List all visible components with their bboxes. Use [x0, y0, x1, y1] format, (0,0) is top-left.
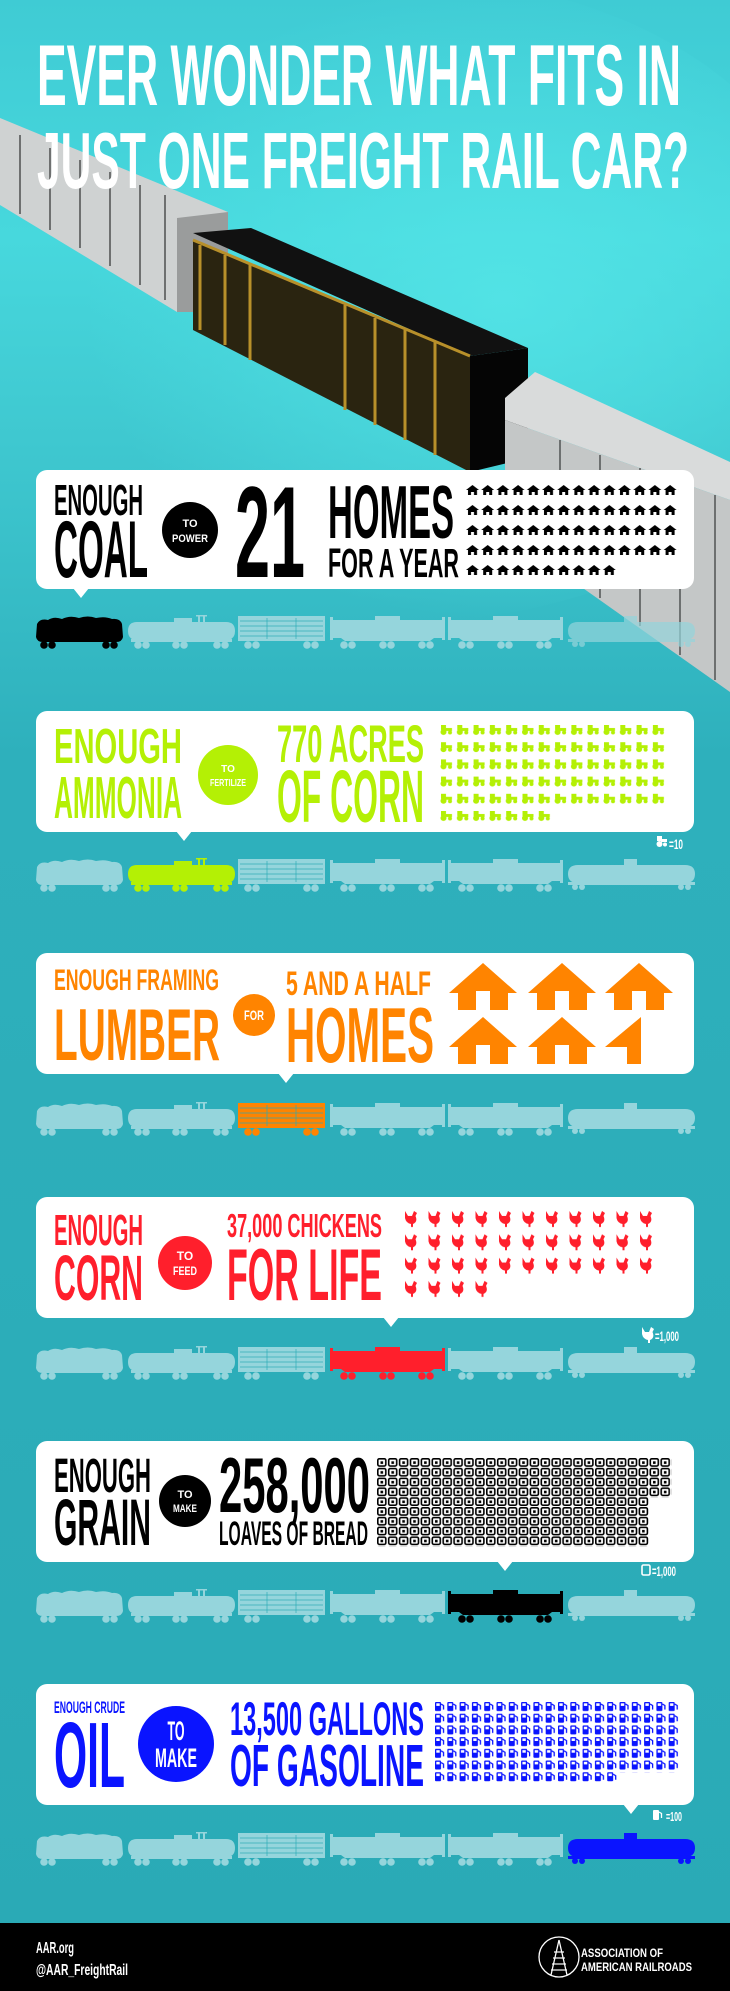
stat: 21 homes [235, 459, 459, 605]
stat: 13,500 gallons of gasoline [230, 1692, 424, 1799]
panel: corn: CORN [54, 1242, 143, 1314]
panel: grain: ENOUGH [54, 1450, 151, 1503]
legend: tractor = 10: =10 [669, 836, 683, 852]
legend: tractor = 10 [656, 836, 683, 852]
stat: 21 homes: FOR A YEAR [328, 540, 459, 586]
title [37, 28, 689, 205]
stat: 37,000 chickens for life [227, 1207, 382, 1316]
panel: corn: ENOUGH [54, 1206, 143, 1255]
stat: 21 homes: 21 [235, 459, 305, 605]
train: oil highlighted [36, 1832, 695, 1866]
circle: to make [159, 1475, 211, 1527]
train: corn highlighted [36, 1346, 695, 1380]
logo: association of american railroads: ASSOCIATION OF [581, 1946, 663, 1960]
train: ammonia highlighted [36, 858, 695, 892]
legend: chicken = 1,000: =1,000 [655, 1328, 679, 1344]
stat: 13,500 gallons of gasoline: 13,500 GALLONS [230, 1692, 424, 1745]
train: lumber highlighted [36, 1102, 695, 1136]
panel: crude oil: OIL [54, 1703, 125, 1807]
footer [0, 1923, 730, 1991]
heading: enough corn [54, 1206, 143, 1314]
train: grain highlighted [36, 1589, 695, 1623]
heading: enough grain [54, 1450, 151, 1559]
circle: to fertilize: TO [221, 764, 235, 775]
panel: coal: COAL [54, 505, 148, 595]
photo: freight boxcars [0, 118, 730, 692]
stat: 37,000 chickens for life: 37,000 CHICKENS [227, 1207, 382, 1244]
footer: links: @AAR_FreightRail [36, 1962, 128, 1979]
icon grid: tractors [440, 725, 668, 822]
circle: to make: TO [168, 1716, 184, 1746]
circle: to fertilize: FERTILIZE [210, 778, 246, 789]
circle: to power: TO [182, 518, 198, 530]
icon grid: bread [377, 1458, 671, 1546]
legend: bread = 1,000: =1,000 [652, 1563, 676, 1579]
heading: enough crude oil: ENOUGH CRUDE [54, 1698, 125, 1717]
circle: to feed: TO [177, 1249, 193, 1263]
circle: to fertilize [198, 745, 258, 805]
icon grid: chickens [403, 1210, 662, 1300]
heading: enough framing lumber [54, 964, 220, 1076]
heading: enough framing lumber: LUMBER [54, 995, 220, 1076]
stat: 5 and a half homes [286, 965, 434, 1079]
heading: enough framing lumber: ENOUGH FRAMING [54, 964, 219, 997]
panel: crude oil: OF GASOLINE [230, 1733, 424, 1799]
panel: ammonia [36, 711, 694, 841]
logo: association of american railroads: AMERICAN RAILROADS [581, 1960, 692, 1974]
heading: enough ammonia [54, 720, 182, 831]
legend: pump = 100 [653, 1809, 682, 1824]
panel: grain: GRAIN [54, 1485, 151, 1559]
panel: coal [36, 459, 694, 605]
circle: to power: POWER [172, 533, 208, 545]
panel: coal: ENOUGH [54, 476, 143, 525]
panel: crude oil [36, 1684, 694, 1814]
circle: for: FOR [244, 1007, 264, 1023]
circle: to feed [158, 1236, 212, 1290]
panel: ammonia: OF CORN [277, 755, 424, 838]
panel: corn [36, 1197, 694, 1327]
stat: 5 and a half homes: 5 AND A HALF [286, 965, 431, 1003]
circle: to make: TO [177, 1489, 193, 1501]
legend: pump = 100: =100 [666, 1809, 682, 1824]
circle: to make: MAKE [155, 1743, 197, 1773]
circle: for [233, 994, 275, 1036]
stat: 770 acres of corn [277, 715, 424, 838]
circle: to feed: FEED [173, 1264, 197, 1278]
legend: chicken = 1,000 [642, 1327, 679, 1344]
stat: 5 and a half homes: HOMES [286, 991, 434, 1079]
icon grid: houses [466, 485, 679, 575]
legend: bread = 1,000 [642, 1563, 676, 1579]
panel: lumber [36, 953, 694, 1083]
icons: houses [449, 963, 673, 1064]
panel: ammonia: AMMONIA [54, 765, 182, 831]
heading: enough ammonia: ENOUGH [54, 720, 182, 774]
panel: coal: HOMES [328, 470, 454, 554]
circle: to make [138, 1706, 214, 1782]
stat: 258,000 loaves of bread [219, 1441, 370, 1553]
panel: grain [36, 1441, 694, 1571]
heading: enough crude oil [54, 1698, 125, 1807]
circle: to make: MAKE [173, 1503, 197, 1515]
stat: 770 acres of corn: 770 ACRES [277, 715, 424, 774]
stat: 258,000 loaves of bread: 258,000 [219, 1441, 370, 1529]
icon grid: gas pumps [435, 1702, 681, 1783]
footer: links: AAR.org [36, 1940, 74, 1957]
panel: corn: FOR LIFE [227, 1235, 382, 1316]
logo: association of american railroads [539, 1937, 692, 1977]
footer: links [36, 1940, 128, 1979]
circle: to power [162, 502, 218, 558]
heading: enough coal [54, 476, 148, 595]
train: coal highlighted [36, 615, 695, 649]
panel: grain: LOAVES OF BREAD [219, 1515, 368, 1553]
